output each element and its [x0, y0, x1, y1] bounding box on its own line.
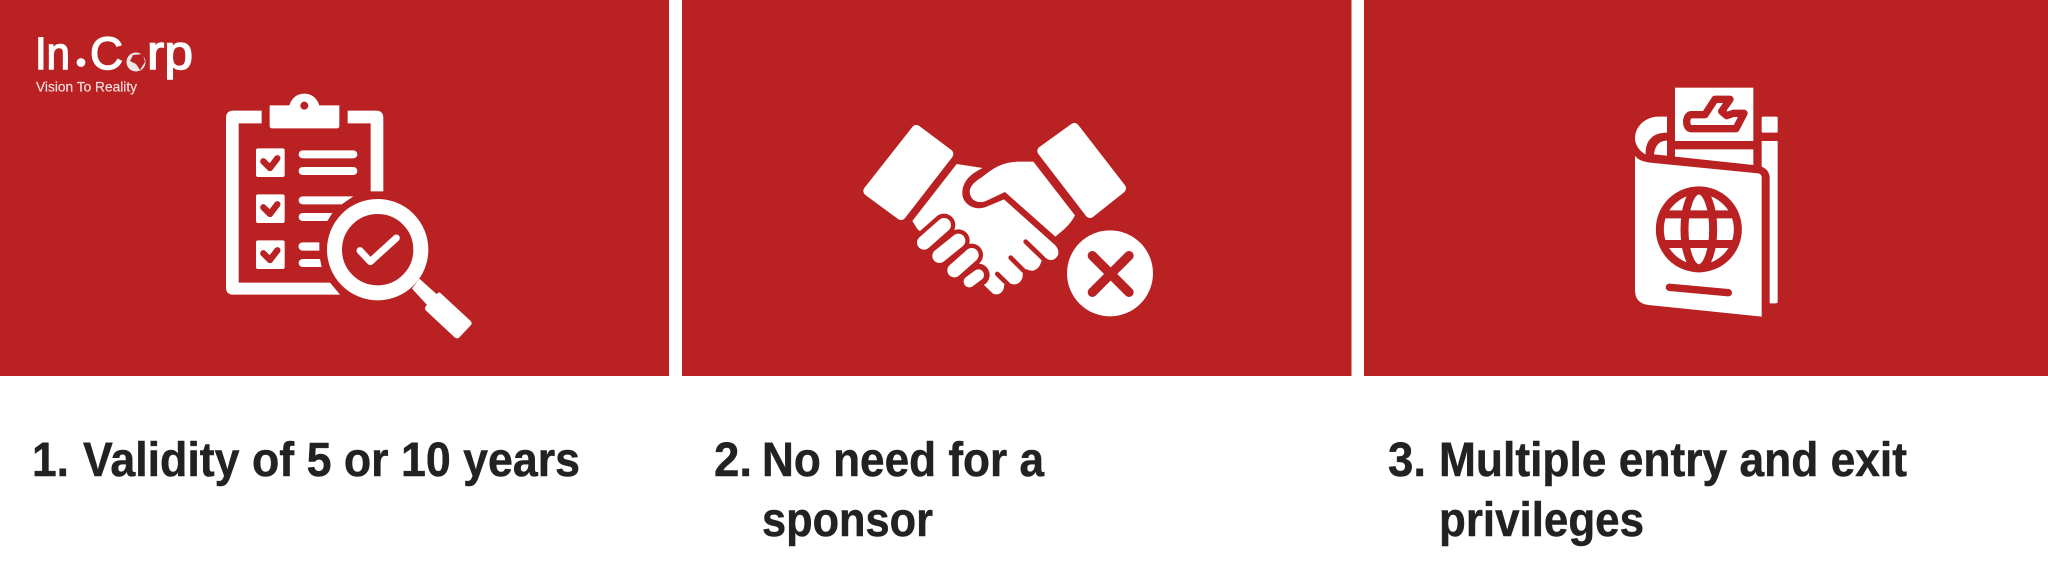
text: point 2: 2. [714, 434, 752, 487]
text: point 3: Multiple entry and exit [1439, 434, 1907, 487]
logo: InCorp: rp [147, 27, 193, 80]
icon: handshake with cross [868, 128, 1153, 316]
logo: InCorp: Vision To Reality [36, 78, 137, 94]
text: point 3: privileges [1439, 494, 1644, 547]
icon: passport with ticket [1635, 88, 1778, 317]
logo: InCorp: C [90, 28, 123, 79]
icon: clipboard with magnifier [226, 94, 472, 338]
logo: InCorp [35, 27, 193, 94]
panel: validity [0, 0, 669, 376]
text: point 2 [714, 434, 1044, 547]
text: point 3: 3. [1388, 434, 1426, 487]
text: point 1: Validity of 5 or 10 years [83, 434, 580, 487]
text: point 2: sponsor [762, 494, 933, 547]
logo: InCorp: In [35, 28, 70, 79]
panel: multiple entry [1364, 0, 2048, 376]
text: point 3 [1388, 434, 1907, 547]
panel: no sponsor [682, 0, 1352, 376]
text: point 1: 1. [32, 434, 69, 487]
text: point 2: No need for a [762, 434, 1044, 487]
